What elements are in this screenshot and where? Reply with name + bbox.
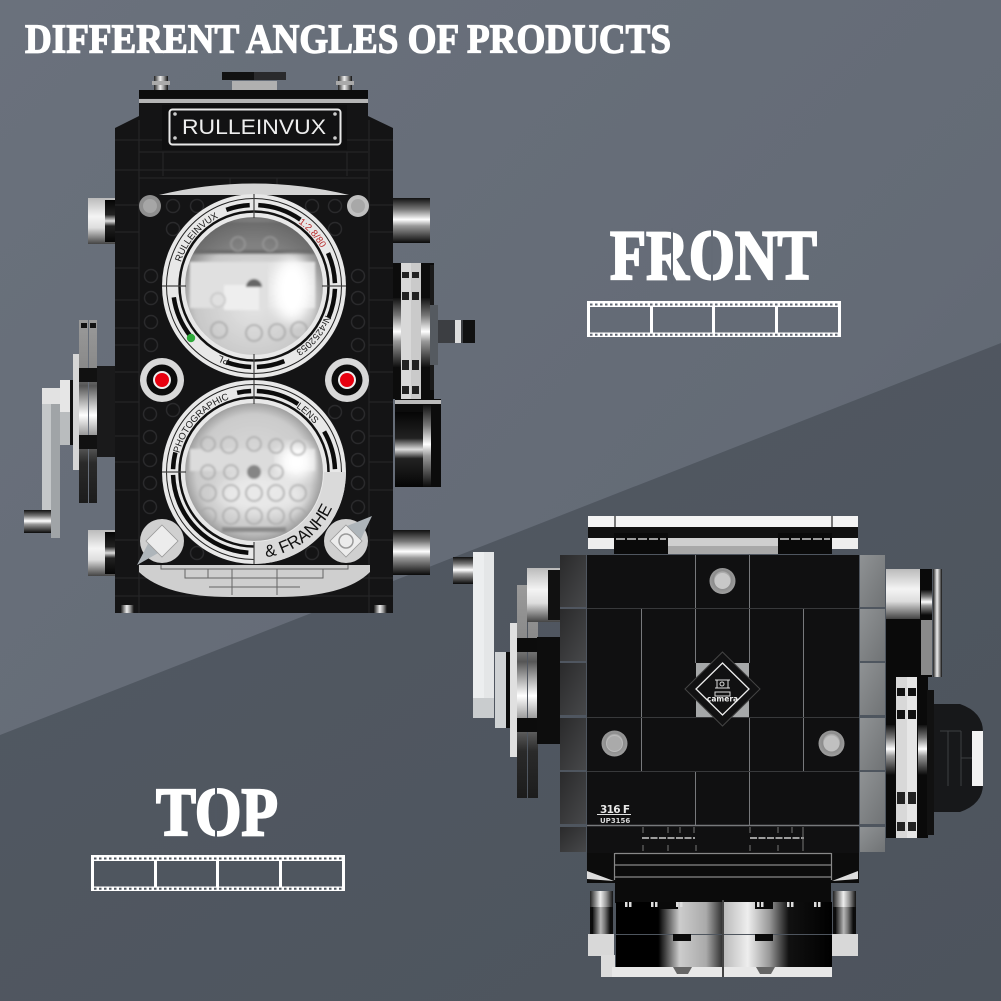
- top camera view: [453, 516, 983, 977]
- left tile column: [560, 555, 586, 852]
- label: FRONT: FRONT: [610, 217, 817, 295]
- lower lens crosshair: [162, 380, 254, 564]
- lower lens white sector: [254, 472, 346, 564]
- left knob and crank: [453, 552, 560, 798]
- model label: 316 F: [600, 804, 630, 816]
- lower lens ring lettering: [173, 394, 332, 557]
- film strip: top: [91, 855, 345, 891]
- bottom feet: [121, 605, 387, 613]
- upper brow plate: [159, 184, 349, 195]
- upper lens glass: [184, 216, 324, 356]
- upper lens crosshair: [162, 194, 346, 378]
- right tile column: [860, 555, 885, 852]
- lower clips: [642, 827, 804, 851]
- upper lens ring lettering: Nr4252053: [296, 316, 332, 356]
- green indicator: [187, 334, 195, 342]
- upper lens ring lettering: PL: [220, 355, 230, 366]
- left side knobs and crank: [24, 198, 115, 576]
- top plate: [587, 555, 859, 853]
- front camera view: [24, 72, 475, 613]
- model label: [597, 804, 631, 825]
- lower plate: [139, 565, 370, 597]
- upper lens ring lettering: 1:2.8/80: [298, 219, 326, 247]
- nameplate: RULLEINVUX: [182, 116, 326, 139]
- lower lens: [162, 380, 346, 564]
- upper lens ring lettering: RULLEINVUX: [174, 212, 218, 262]
- label: TOP: TOP: [156, 774, 278, 850]
- upper lens: [162, 194, 346, 378]
- lower lens ring lettering: PHOTOGRAPHIC: [173, 394, 228, 453]
- lower lens ring lettering: LENS: [296, 402, 318, 423]
- camera body: [115, 90, 393, 613]
- model label: UP3156: [600, 817, 630, 825]
- lower lens ring lettering: & FRANHE: [266, 503, 332, 557]
- upper lens ring lettering: [174, 212, 332, 366]
- lower lens glass: [184, 402, 324, 542]
- nameplate: [162, 105, 347, 150]
- centre badge: [685, 652, 760, 726]
- right side knobs and wheel: [392, 198, 475, 575]
- title: DIFFERENT ANGLES OF PRODUCTS: [25, 16, 671, 62]
- hinge pegs and top shutter: [152, 72, 354, 90]
- focus knobs: [137, 516, 372, 565]
- badge camera icon: [715, 680, 730, 696]
- film strip: front: [587, 301, 841, 337]
- viewfinder dots: [140, 358, 369, 402]
- badge word: camera: [707, 694, 738, 704]
- stencil gap: TOP: [215, 786, 217, 840]
- stencil gaps: FRONT: [672, 228, 712, 284]
- background lower diagonal panel: [0, 343, 1001, 1001]
- dark studs: [144, 200, 364, 560]
- front lens hood and drums: [587, 853, 859, 977]
- round screw buttons: [602, 568, 844, 756]
- corner screws: [139, 195, 369, 217]
- rear hinge strip: [588, 516, 858, 554]
- right knob, wheel and shutter lever: [886, 569, 983, 838]
